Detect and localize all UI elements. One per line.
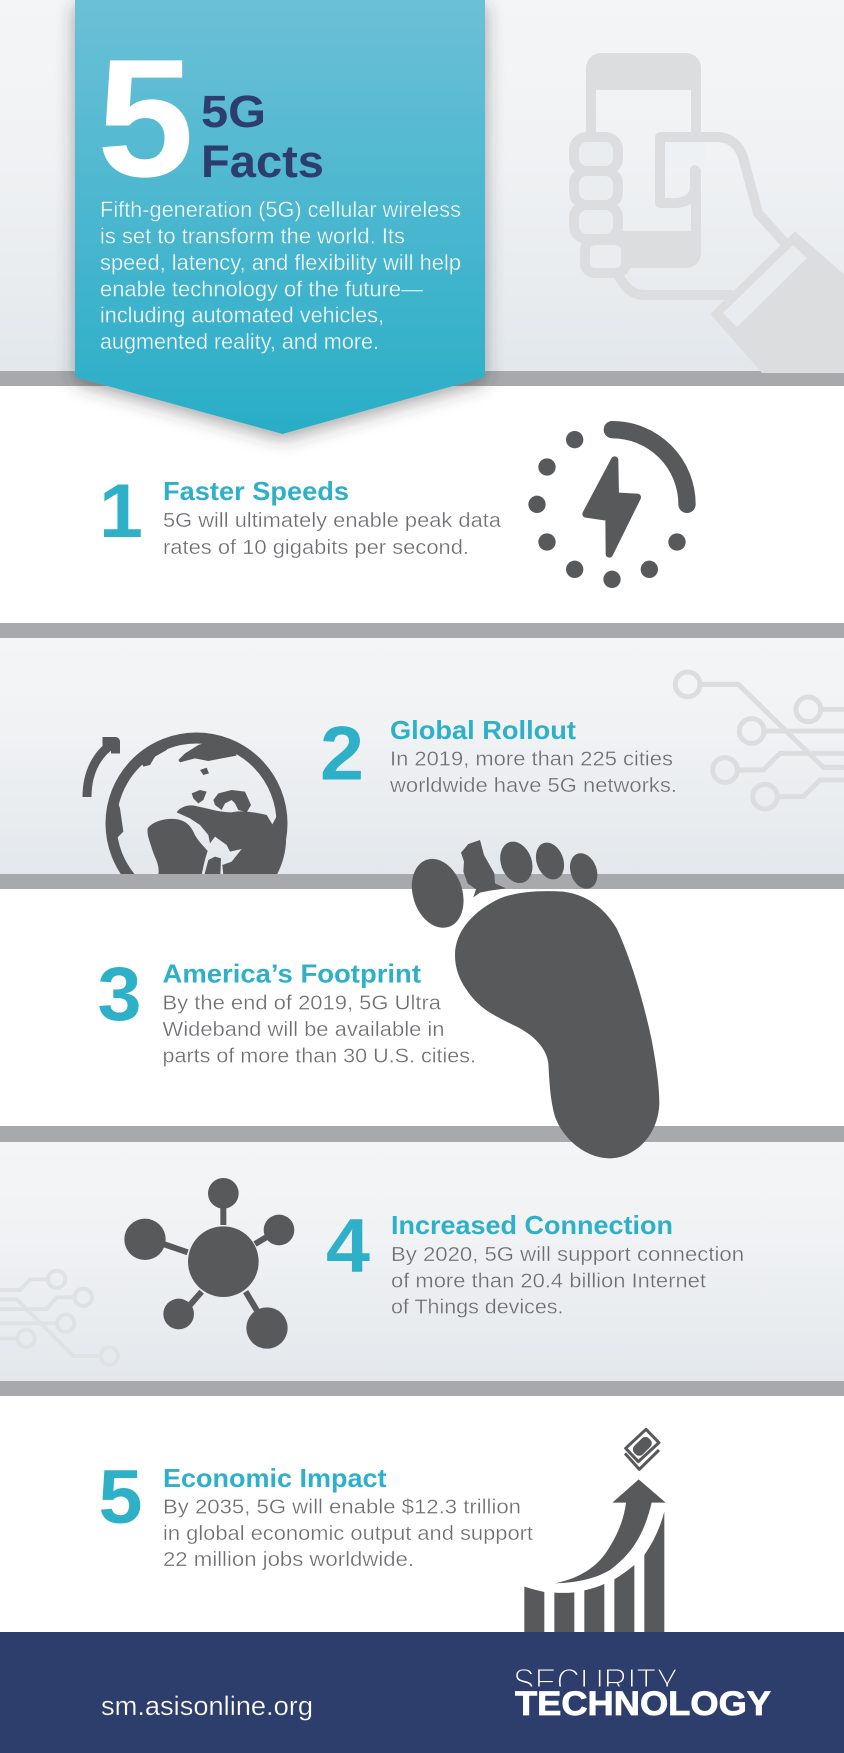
description bbox=[163, 510, 502, 559]
description: 5G will ultimately enable peak data bbox=[163, 510, 502, 532]
big numeral 5: 5 bbox=[97, 24, 194, 212]
heading: 5G bbox=[201, 86, 266, 137]
logo: TECHNOLOGY bbox=[515, 1685, 771, 1723]
description: In 2019, more than 225 cities bbox=[390, 749, 673, 771]
fact 3: america's footprint bbox=[98, 952, 476, 1068]
description bbox=[391, 1244, 744, 1318]
icon: globe with arrow bbox=[82, 732, 288, 874]
website url: sm.asisonline.org bbox=[101, 1691, 313, 1721]
description bbox=[389, 749, 677, 797]
intro text: speed, latency, and flexibility will help bbox=[100, 250, 461, 275]
intro text bbox=[100, 197, 461, 354]
number 5: 5 bbox=[98, 1455, 142, 1540]
description: of more than 20.4 billion Internet bbox=[391, 1270, 706, 1292]
heading: Facts bbox=[201, 136, 324, 187]
intro text: augmented reality, and more. bbox=[100, 329, 379, 354]
description bbox=[162, 992, 476, 1068]
description: rates of 10 gigabits per second. bbox=[163, 537, 469, 559]
logo: SECURITY bbox=[513, 1662, 678, 1704]
description: Wideband will be available in bbox=[162, 1019, 444, 1041]
title: Faster Speeds bbox=[163, 476, 349, 506]
description: worldwide have 5G networks. bbox=[389, 775, 677, 797]
number 4: 4 bbox=[326, 1204, 370, 1288]
description: By the end of 2019, 5G Ultra bbox=[162, 992, 442, 1014]
title: America’s Footprint bbox=[162, 959, 421, 989]
icon: circuit lines top right bbox=[675, 672, 844, 809]
number 1: 1 bbox=[99, 469, 143, 554]
banner bbox=[75, 0, 485, 434]
intro text: is set to transform the world. Its bbox=[100, 224, 405, 249]
description bbox=[163, 1497, 533, 1571]
description: of Things devices. bbox=[391, 1296, 564, 1318]
heading bbox=[201, 86, 324, 187]
footer bbox=[0, 1632, 844, 1753]
intro text: including automated vehicles, bbox=[100, 303, 384, 328]
icon: circuit lines bottom left bbox=[0, 1271, 118, 1365]
description: 22 million jobs worldwide. bbox=[163, 1549, 414, 1571]
number 2: 2 bbox=[320, 712, 364, 796]
fact 2: global rollout bbox=[320, 712, 677, 797]
title: Increased Connection bbox=[391, 1210, 673, 1240]
intro text: Fifth-generation (5G) cellular wireless bbox=[100, 197, 461, 222]
icon: hand holding phone bbox=[574, 53, 844, 371]
title: Global Rollout bbox=[390, 715, 576, 745]
description: parts of more than 30 U.S. cities. bbox=[162, 1046, 476, 1068]
title: Economic Impact bbox=[163, 1463, 387, 1493]
number 3: 3 bbox=[98, 952, 142, 1037]
fact 5: economic impact bbox=[98, 1455, 533, 1571]
description: By 2020, 5G will support connection bbox=[391, 1244, 744, 1266]
intro text: enable technology of the future— bbox=[100, 276, 423, 302]
icon: lightning speed dial bbox=[528, 430, 687, 588]
icon: network nodes bbox=[124, 1178, 294, 1349]
description: in global economic output and support bbox=[163, 1523, 533, 1545]
icon: growth chart with arrow and money bbox=[524, 1429, 666, 1632]
fact 1: faster speeds bbox=[99, 469, 502, 559]
divider bars bbox=[0, 371, 844, 1396]
logo bbox=[514, 1669, 772, 1716]
description: By 2035, 5G will enable $12.3 trillion bbox=[163, 1497, 521, 1519]
fact 4: increased connection bbox=[326, 1204, 744, 1318]
icon: footprint bbox=[403, 837, 659, 1158]
